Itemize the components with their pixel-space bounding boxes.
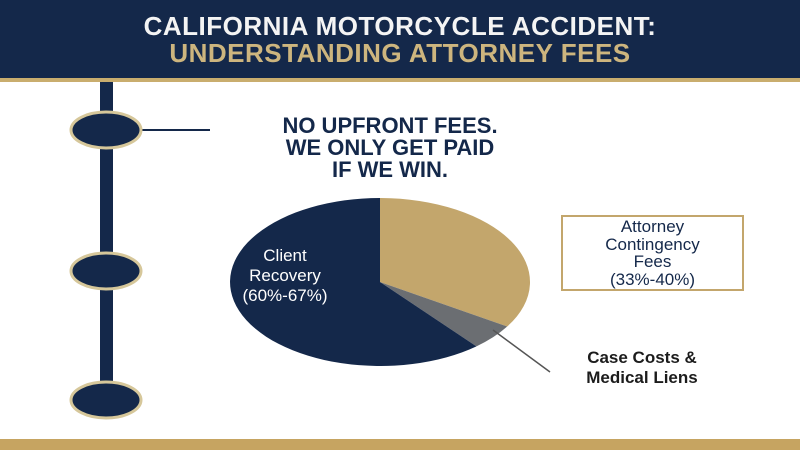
client recovery label: Recovery xyxy=(249,266,321,285)
title: UNDERSTANDING ATTORNEY FEES xyxy=(169,38,631,68)
footer bar xyxy=(0,439,800,450)
title: CALIFORNIA MOTORCYCLE ACCIDENT: xyxy=(144,11,656,41)
callout: attorney fees: Contingency xyxy=(605,234,700,254)
client recovery label: Client xyxy=(263,246,307,265)
label: case costs: Medical Liens xyxy=(586,368,698,387)
header banner xyxy=(0,0,800,82)
callout: attorney fees: Attorney xyxy=(621,217,684,236)
headline text: IF WE WIN. xyxy=(332,157,448,182)
label: case costs: Case Costs & xyxy=(587,348,697,367)
callout: attorney fees: (33%-40%) xyxy=(610,270,695,288)
client recovery label: (60%-67%) xyxy=(242,286,328,305)
headline text: WE ONLY GET PAID xyxy=(286,135,494,160)
client recovery label xyxy=(242,246,328,305)
callout: attorney fees: Fees xyxy=(634,252,671,271)
label: case costs xyxy=(586,348,698,387)
headline text: NO UPFRONT FEES. xyxy=(282,113,498,138)
headline text xyxy=(282,113,498,182)
title xyxy=(144,11,656,68)
callout: attorney fees xyxy=(561,215,744,291)
